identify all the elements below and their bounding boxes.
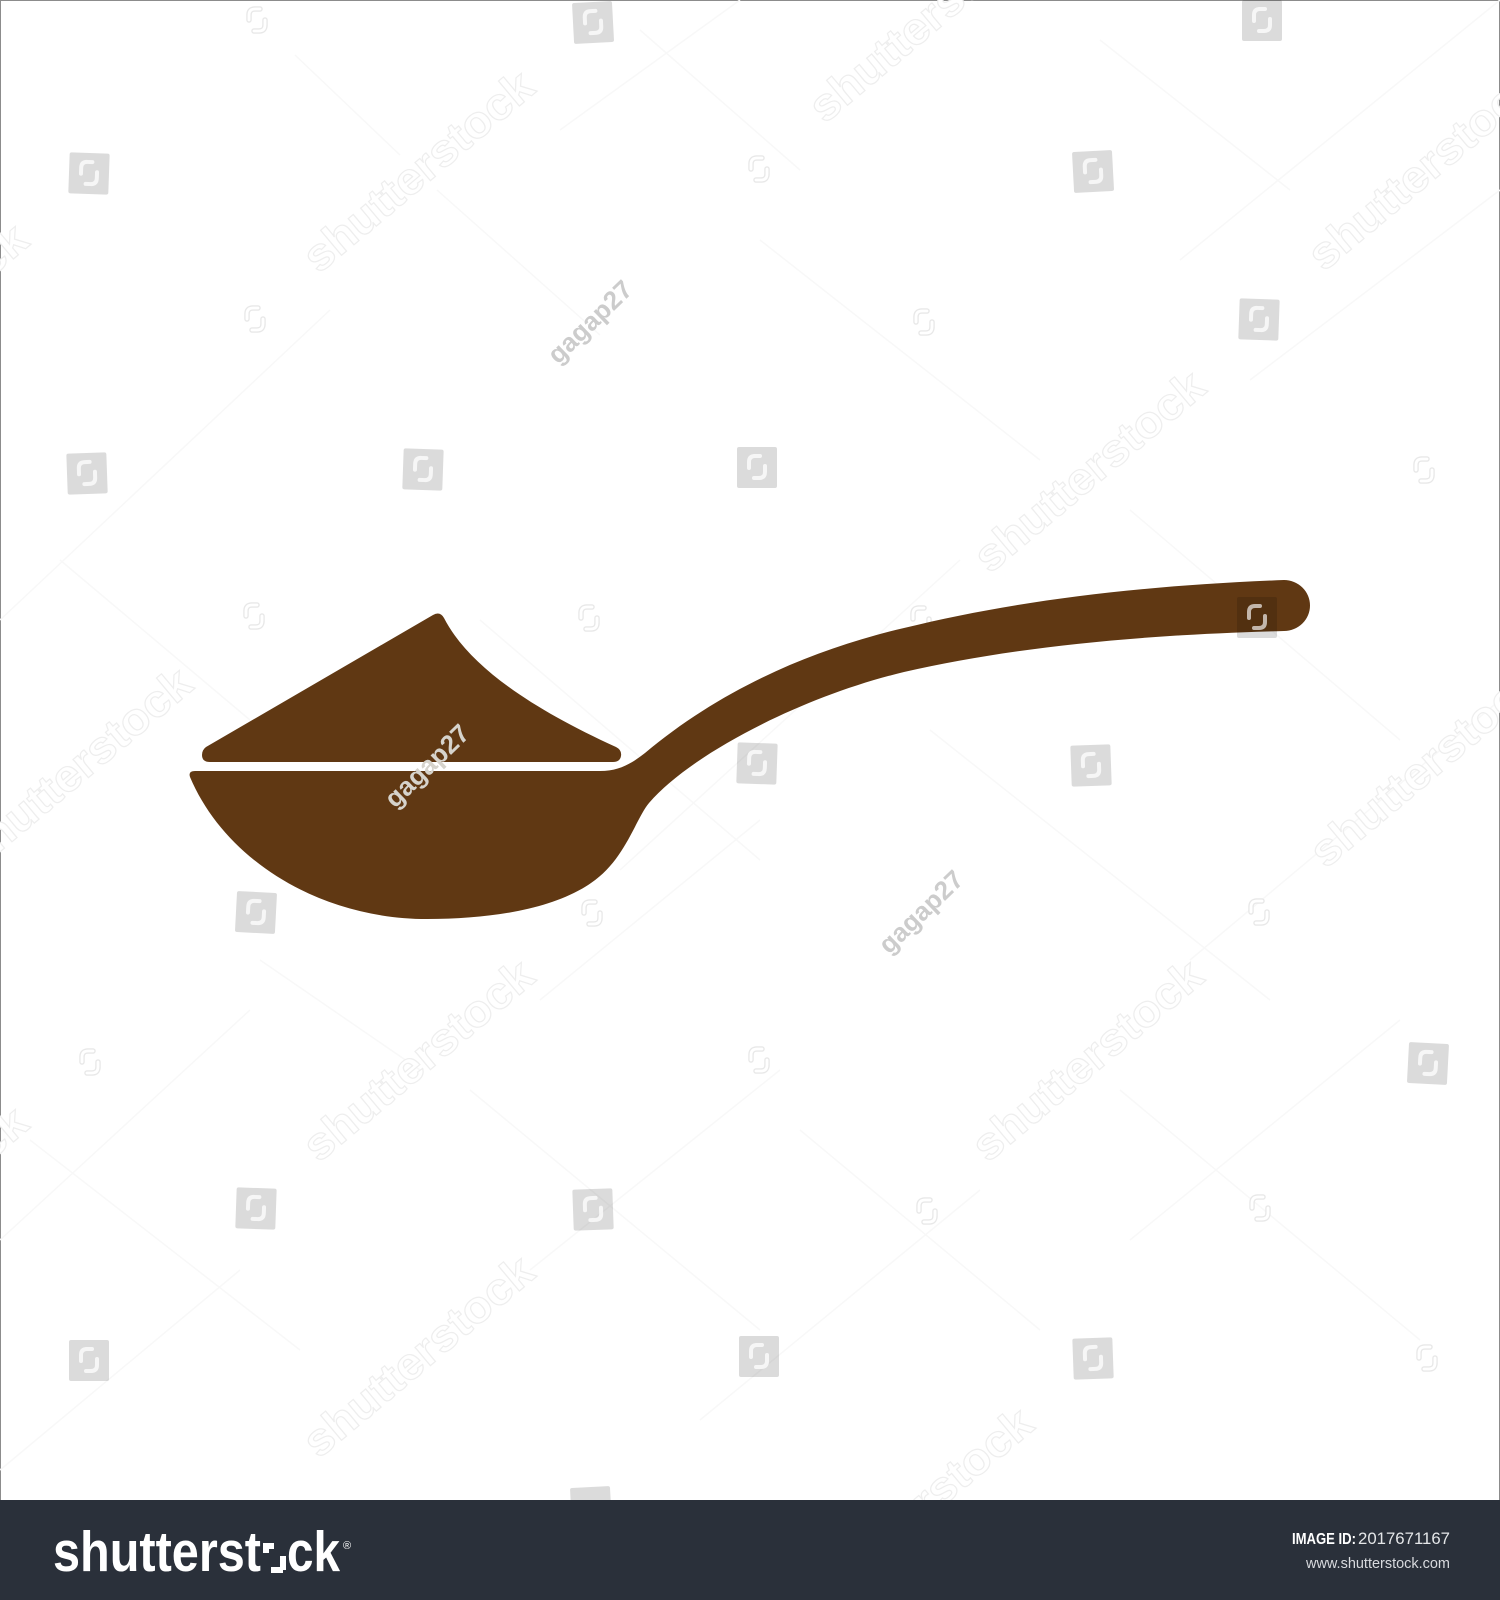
spoon xyxy=(190,580,1310,919)
footer bar: 2017671167 xyxy=(1358,1529,1450,1548)
watermark: gagap27 contributor names: gagap27 xyxy=(872,864,969,959)
watermark: shutterstock outline text: shutterstock xyxy=(961,948,1213,1171)
watermark: shutterstock outline text: shutterstock xyxy=(963,359,1215,582)
watermark: small outline logo icons xyxy=(82,9,1435,1369)
website: www.shutterstock.com xyxy=(1305,1555,1450,1572)
shutterstock logo: ® xyxy=(343,1540,351,1552)
watermark: gagap27 contributor names: gagap27 xyxy=(541,274,638,369)
powder heap xyxy=(202,614,621,762)
watermark: gagap27 contributor names: gagap27 xyxy=(378,718,475,813)
spoon bowl and handle xyxy=(190,580,1310,919)
watermark: shutterstock outline text: shutterstock xyxy=(292,59,544,282)
shutterstock logo: ck xyxy=(287,1520,340,1584)
footer bar xyxy=(0,1500,1500,1600)
image ID: IMAGE ID: xyxy=(1292,1531,1356,1548)
watermark: gagap27 contributor names xyxy=(378,274,969,959)
watermark: shutterstock outline text: shutterstock xyxy=(292,948,544,1171)
shutterstock logo: shutterst xyxy=(53,1520,261,1584)
watermark: shutterstock outline text: shutterstock xyxy=(292,1244,544,1467)
